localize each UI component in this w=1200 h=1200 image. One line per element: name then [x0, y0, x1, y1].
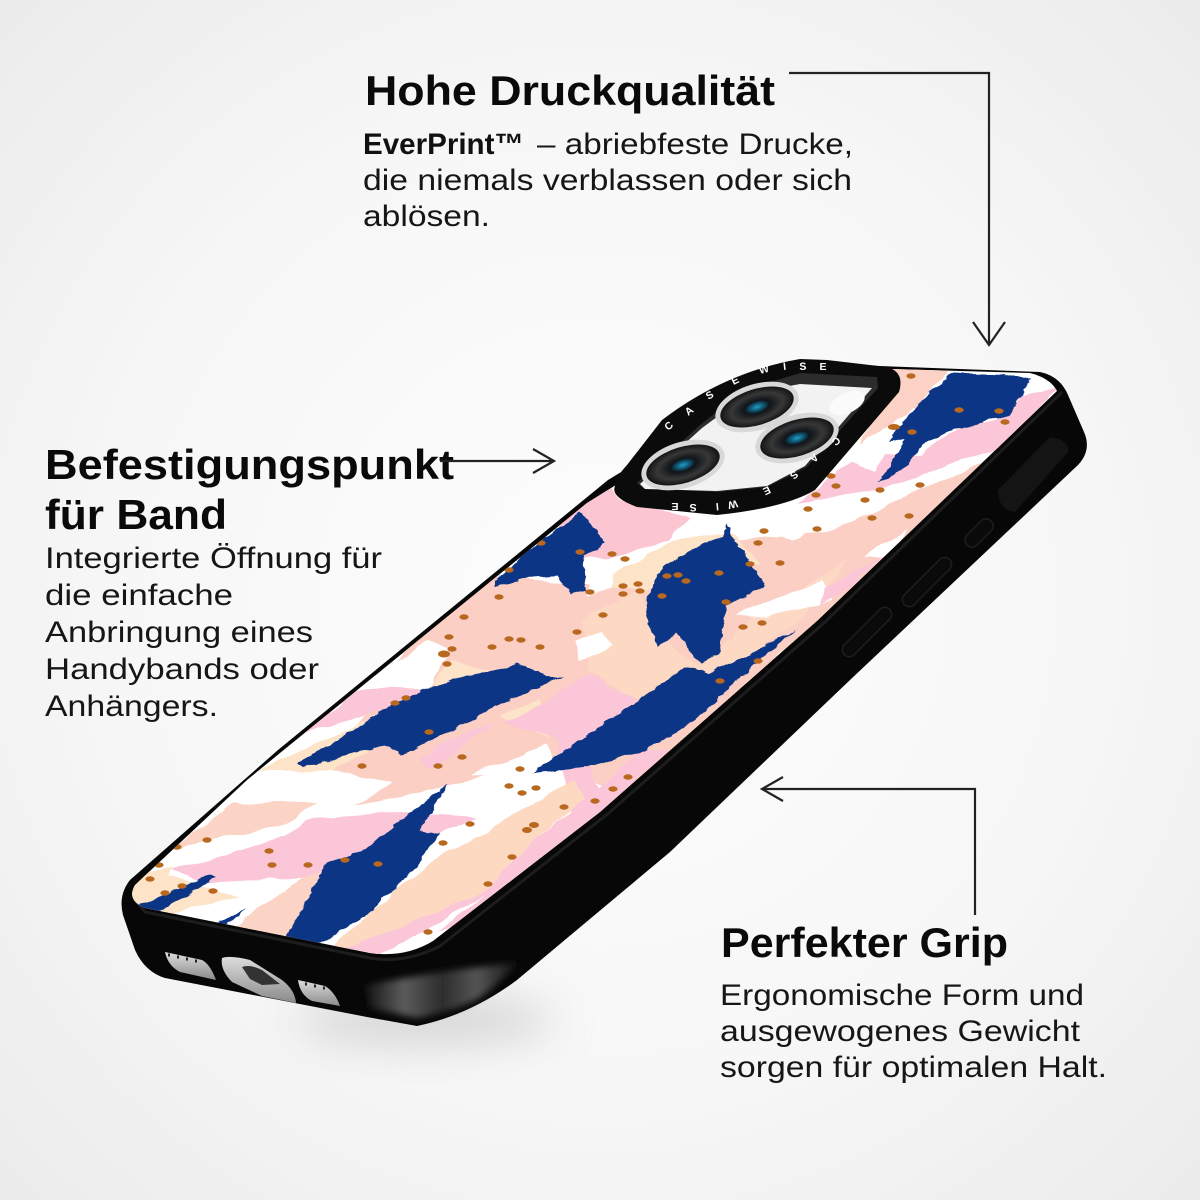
- arrow: grip: [762, 777, 975, 915]
- usb-c port: [222, 957, 296, 1003]
- text: print quality: – abriebfeste Drucke,: [537, 128, 853, 161]
- camera glass: [640, 384, 872, 491]
- lower white slashes: [736, 530, 908, 617]
- bottom white: [394, 896, 484, 948]
- glossy bottom corner: [365, 962, 520, 1018]
- right pink: [340, 750, 670, 960]
- navy stroke upper left: [494, 512, 606, 595]
- navy stroke centre: [646, 525, 765, 663]
- heading: attachment point: für Band: [45, 491, 227, 538]
- text: attachment point: Handybands oder: [45, 653, 319, 686]
- navy small strokes: [135, 875, 248, 928]
- pink under camera: [558, 488, 690, 560]
- text: attachment point: Anhängers.: [45, 690, 218, 723]
- ring text top: CASEWISE: [662, 361, 827, 433]
- white gap: [470, 745, 556, 780]
- navy brush strokes: [135, 373, 1032, 945]
- navy stroke left: [297, 663, 563, 768]
- text: attachment point: Integrierte Öffnung für: [45, 542, 382, 575]
- lens top: [709, 372, 805, 442]
- arrow: print quality: [789, 73, 1005, 345]
- navy stroke lower right: [532, 630, 794, 773]
- right light peach: [327, 780, 585, 950]
- pink left: [300, 687, 432, 735]
- top right pink: [798, 385, 1060, 503]
- pink blob: [420, 673, 639, 815]
- side button volume down: [839, 604, 895, 660]
- gold dots: [145, 373, 1040, 935]
- printed artwork: [132, 369, 1057, 954]
- text: grip: sorgen für optimalen Halt.: [720, 1051, 1107, 1084]
- phone case: [122, 363, 1087, 1026]
- bottom peach wedge: [233, 867, 327, 945]
- text: print quality: EverPrint™: [363, 128, 524, 161]
- cream mid: [430, 660, 550, 740]
- top peach: [860, 362, 953, 445]
- bezel: [135, 392, 1062, 960]
- text: grip: ausgewogenes Gewicht: [720, 1015, 1080, 1048]
- heading: attachment point: Befestigungspunkt: [45, 441, 454, 488]
- ring text bottom: CASEWISE: [671, 434, 843, 513]
- white left: [340, 640, 450, 700]
- white chip: [575, 577, 614, 661]
- peach field centre: [332, 463, 982, 790]
- navy stroke bottom: [285, 785, 447, 945]
- text: grip: Ergonomische Form und: [720, 979, 1084, 1012]
- side mute switch: [962, 516, 996, 550]
- cream left band: [255, 723, 383, 772]
- text: grip: [720, 979, 1107, 1084]
- heading: grip: Perfekter Grip: [721, 919, 1008, 966]
- phone shadow: [295, 996, 555, 1044]
- right speaker: [298, 980, 340, 1006]
- arrow: attachment point: [440, 449, 554, 473]
- bottom cream: [132, 866, 238, 914]
- heading: attachment point: [45, 441, 454, 538]
- lens left: [635, 430, 731, 500]
- pastel brush strokes: [125, 362, 1060, 960]
- big pink: [170, 812, 477, 883]
- case body: [122, 363, 1087, 1026]
- text: attachment point: die einfache: [45, 579, 233, 612]
- top white slash: [852, 454, 886, 472]
- navy stroke top right: [877, 373, 1032, 483]
- text: print quality: ablösen.: [363, 200, 490, 233]
- camera ring: [614, 359, 900, 515]
- pink slash: [822, 557, 880, 603]
- flash: [826, 386, 868, 420]
- bottom peach top: [167, 803, 317, 850]
- peach diagonal: [356, 713, 549, 807]
- heading: print quality: Hohe Druckqualität: [365, 67, 775, 114]
- side action bump: [998, 437, 1068, 512]
- cream: [610, 533, 763, 590]
- side button volume up: [899, 554, 955, 610]
- text: attachment point: Anbringung eines: [45, 616, 313, 649]
- light peach band: [580, 560, 850, 700]
- left speaker: [165, 952, 216, 980]
- text: attachment point: [45, 542, 382, 723]
- white band: [782, 452, 989, 540]
- text: print quality: [363, 128, 853, 233]
- ring inner wall: [637, 373, 878, 492]
- lens right: [749, 403, 845, 473]
- text: print quality: die niemals verblassen oder sich: [363, 164, 852, 197]
- camera module: [614, 359, 900, 515]
